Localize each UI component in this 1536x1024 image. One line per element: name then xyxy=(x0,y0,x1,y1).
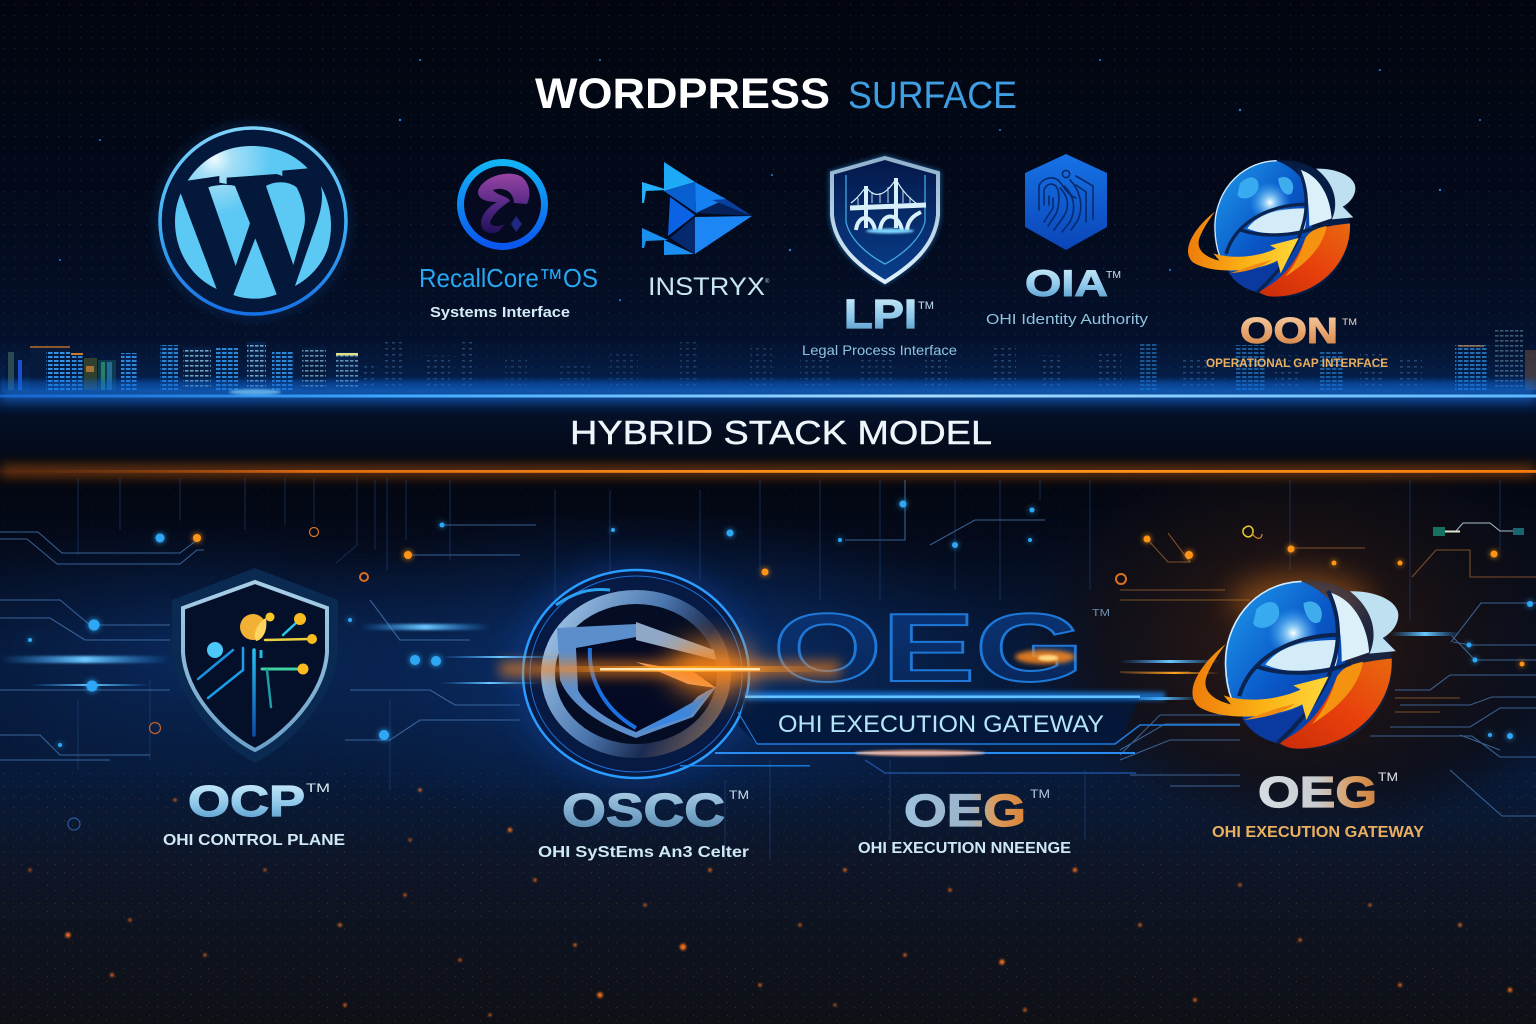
icon: OCP shield xyxy=(172,568,338,763)
icon: WordPress logo xyxy=(147,115,359,327)
label: OEG: OEG xyxy=(904,785,1026,836)
title xyxy=(535,70,1017,118)
label: Operational Gap Interface: OPERATIONAL GAP INTERFACE xyxy=(1206,356,1388,370)
label: INSTRYX: INSTRYX xyxy=(648,273,765,301)
icon: OSCC ring xyxy=(511,559,761,789)
item: OON xyxy=(1188,160,1388,370)
label: OHI Execution Engine: OHI EXECUTION NNEENGE xyxy=(858,840,1071,857)
city skyline xyxy=(0,328,1536,394)
label: RecallCore OS: RecallCore™OS xyxy=(419,263,598,293)
item: LPI xyxy=(802,155,957,358)
OEG gateway banner xyxy=(680,593,1240,773)
item: RecallCore OS xyxy=(419,162,598,321)
title: WORDPRESS xyxy=(535,70,830,118)
item: OIA xyxy=(986,154,1149,328)
blue divider line xyxy=(0,389,1536,401)
OCP shield and labels xyxy=(163,568,345,849)
label: OIA: OIA xyxy=(1025,263,1108,304)
label: OHI Execution Gateway: OHI EXECUTION GATEWAY xyxy=(778,711,1104,738)
ring nodes xyxy=(68,526,1262,830)
OEG centre labels: TM xyxy=(1030,789,1050,801)
orange particles xyxy=(29,788,1512,1016)
icon: RecallCore ring xyxy=(460,162,544,246)
OEG globe and labels xyxy=(1192,575,1424,841)
emblem flare xyxy=(440,642,840,694)
OSCC emblem and labels: TM xyxy=(729,788,749,802)
gateway panel xyxy=(680,692,1240,773)
icon: OIA fingerprint hexagon xyxy=(1025,154,1107,250)
OCP shield and labels: TM xyxy=(306,781,330,795)
orange divider line xyxy=(0,466,1536,476)
OEG centre labels xyxy=(858,785,1071,857)
chip connector xyxy=(1433,523,1524,536)
label: LPI: LPI xyxy=(844,291,917,337)
label: Systems Interface: Systems Interface xyxy=(430,304,570,321)
icon: OON globe xyxy=(1188,160,1355,297)
item: OIA: TM xyxy=(1106,270,1121,281)
background: lower stack xyxy=(0,472,1536,1024)
OEG gateway banner: TM xyxy=(1092,608,1110,619)
item: INSTRYX: ® xyxy=(765,278,770,285)
icon: INSTRYX triangles xyxy=(642,162,752,255)
OSCC emblem and labels xyxy=(511,559,761,861)
title: SURFACE xyxy=(848,75,1017,117)
OEG globe and labels: TM xyxy=(1378,772,1398,784)
circuit traces xyxy=(0,478,1536,860)
blue top sparks xyxy=(59,59,1481,301)
label: OON: OON xyxy=(1240,310,1338,351)
circuit nodes xyxy=(28,500,1533,747)
label: OHI Execution Gateway: OHI EXECUTION GATEWAY xyxy=(1212,824,1424,841)
item: OON: TM xyxy=(1342,317,1357,328)
label: OSCC: OSCC xyxy=(562,784,725,836)
background: upper surface xyxy=(0,0,1536,396)
band: hybrid stack model xyxy=(0,389,1536,476)
icon: OEG globe xyxy=(1192,581,1398,749)
label: OCP: OCP xyxy=(188,777,305,826)
label: Legal Process Interface: Legal Process Interface xyxy=(802,342,957,358)
item: LPI: TM xyxy=(918,300,934,312)
label: OHI Identity Authority: OHI Identity Authority xyxy=(986,311,1149,328)
label: OEG: OEG xyxy=(1258,768,1377,817)
label: OHI Systems and Center: OHI SyStEms An3 Celter xyxy=(538,844,749,861)
icon: LPI bridge shield xyxy=(829,155,941,285)
large OEG wordmark: OEG xyxy=(773,593,1084,702)
heading: hybrid stack model: HYBRID STACK MODEL xyxy=(570,414,992,451)
item: INSTRYX xyxy=(642,162,770,301)
label: OHI Control Plane: OHI CONTROL PLANE xyxy=(163,832,345,849)
light streaks xyxy=(0,624,1460,700)
